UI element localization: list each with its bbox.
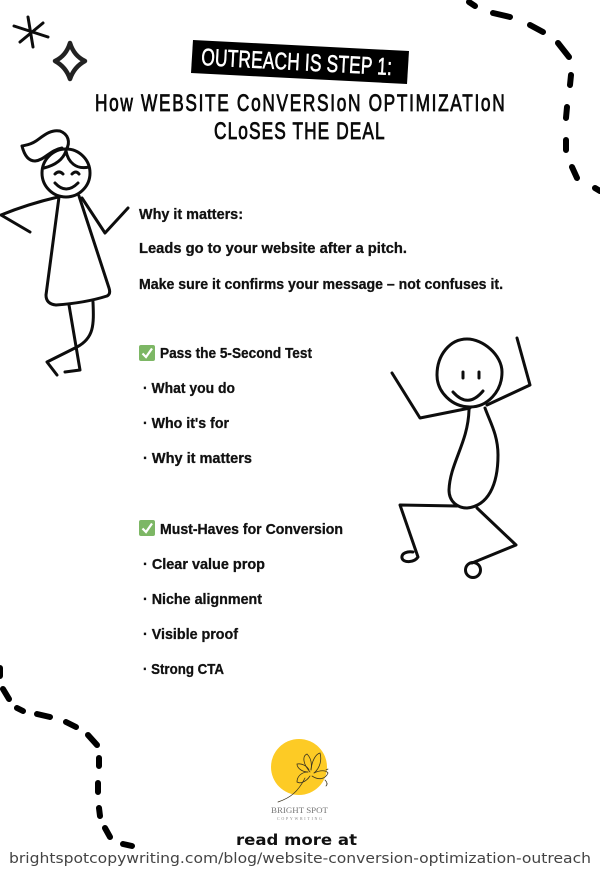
footer: read more: read more at [236,831,357,849]
checklist: must-haves: Must-Haves for Conversion [160,521,343,538]
checklist: must-haves: · Niche alignment [143,591,262,608]
checklist: must-haves: · Visible proof [143,626,239,643]
checklist: must-haves: · Strong CTA [143,661,224,678]
checklist: 5-second test: · Why it matters [143,450,252,467]
icon: yellow circle with flower [271,739,328,802]
text block: why it matters: Make sure it confirms your message – not confuses it. [139,276,503,293]
footer: url: brightspotcopywriting.com/blog/website-conversion-optimization-outreach [9,851,591,867]
text block: why it matters [139,206,503,293]
logo: Bright Spot Copywriting: BRIGHT SPOT [271,805,329,815]
checklist: must-haves: · Clear value prop [143,556,265,573]
illustration: stick figure dancing [392,338,530,578]
illustration: stick girl [1,131,128,375]
checklist: 5-second test: Pass the 5-Second Test [160,345,312,362]
icon: asterisk doodle [14,17,48,47]
heading [95,90,505,145]
text block: why it matters: Leads go to your website after a pitch. [139,240,407,257]
logo: Bright Spot Copywriting: COPYWRITING [277,816,322,821]
logo: Bright Spot Copywriting [271,739,329,821]
heading: CLoSES THE DEAL [214,118,385,145]
title banner: OUTREACH IS STEP 1: [201,44,393,81]
checklist: must-haves [139,520,343,678]
heading: How WEBSITE CoNVERSIoN OPTIMIZATIoN [95,90,505,117]
checklist: 5-second test: · What you do [143,380,235,397]
checklist: 5-second test [139,345,312,467]
icon: diamond sparkle [55,43,85,79]
checklist: 5-second test: · Who it's for [143,415,229,432]
text block: why it matters: Why it matters: [139,206,243,223]
icon: green check [139,345,155,361]
icon: green check [139,520,155,536]
dashed line: top right [469,2,600,191]
dashed line: bottom left [0,668,132,846]
